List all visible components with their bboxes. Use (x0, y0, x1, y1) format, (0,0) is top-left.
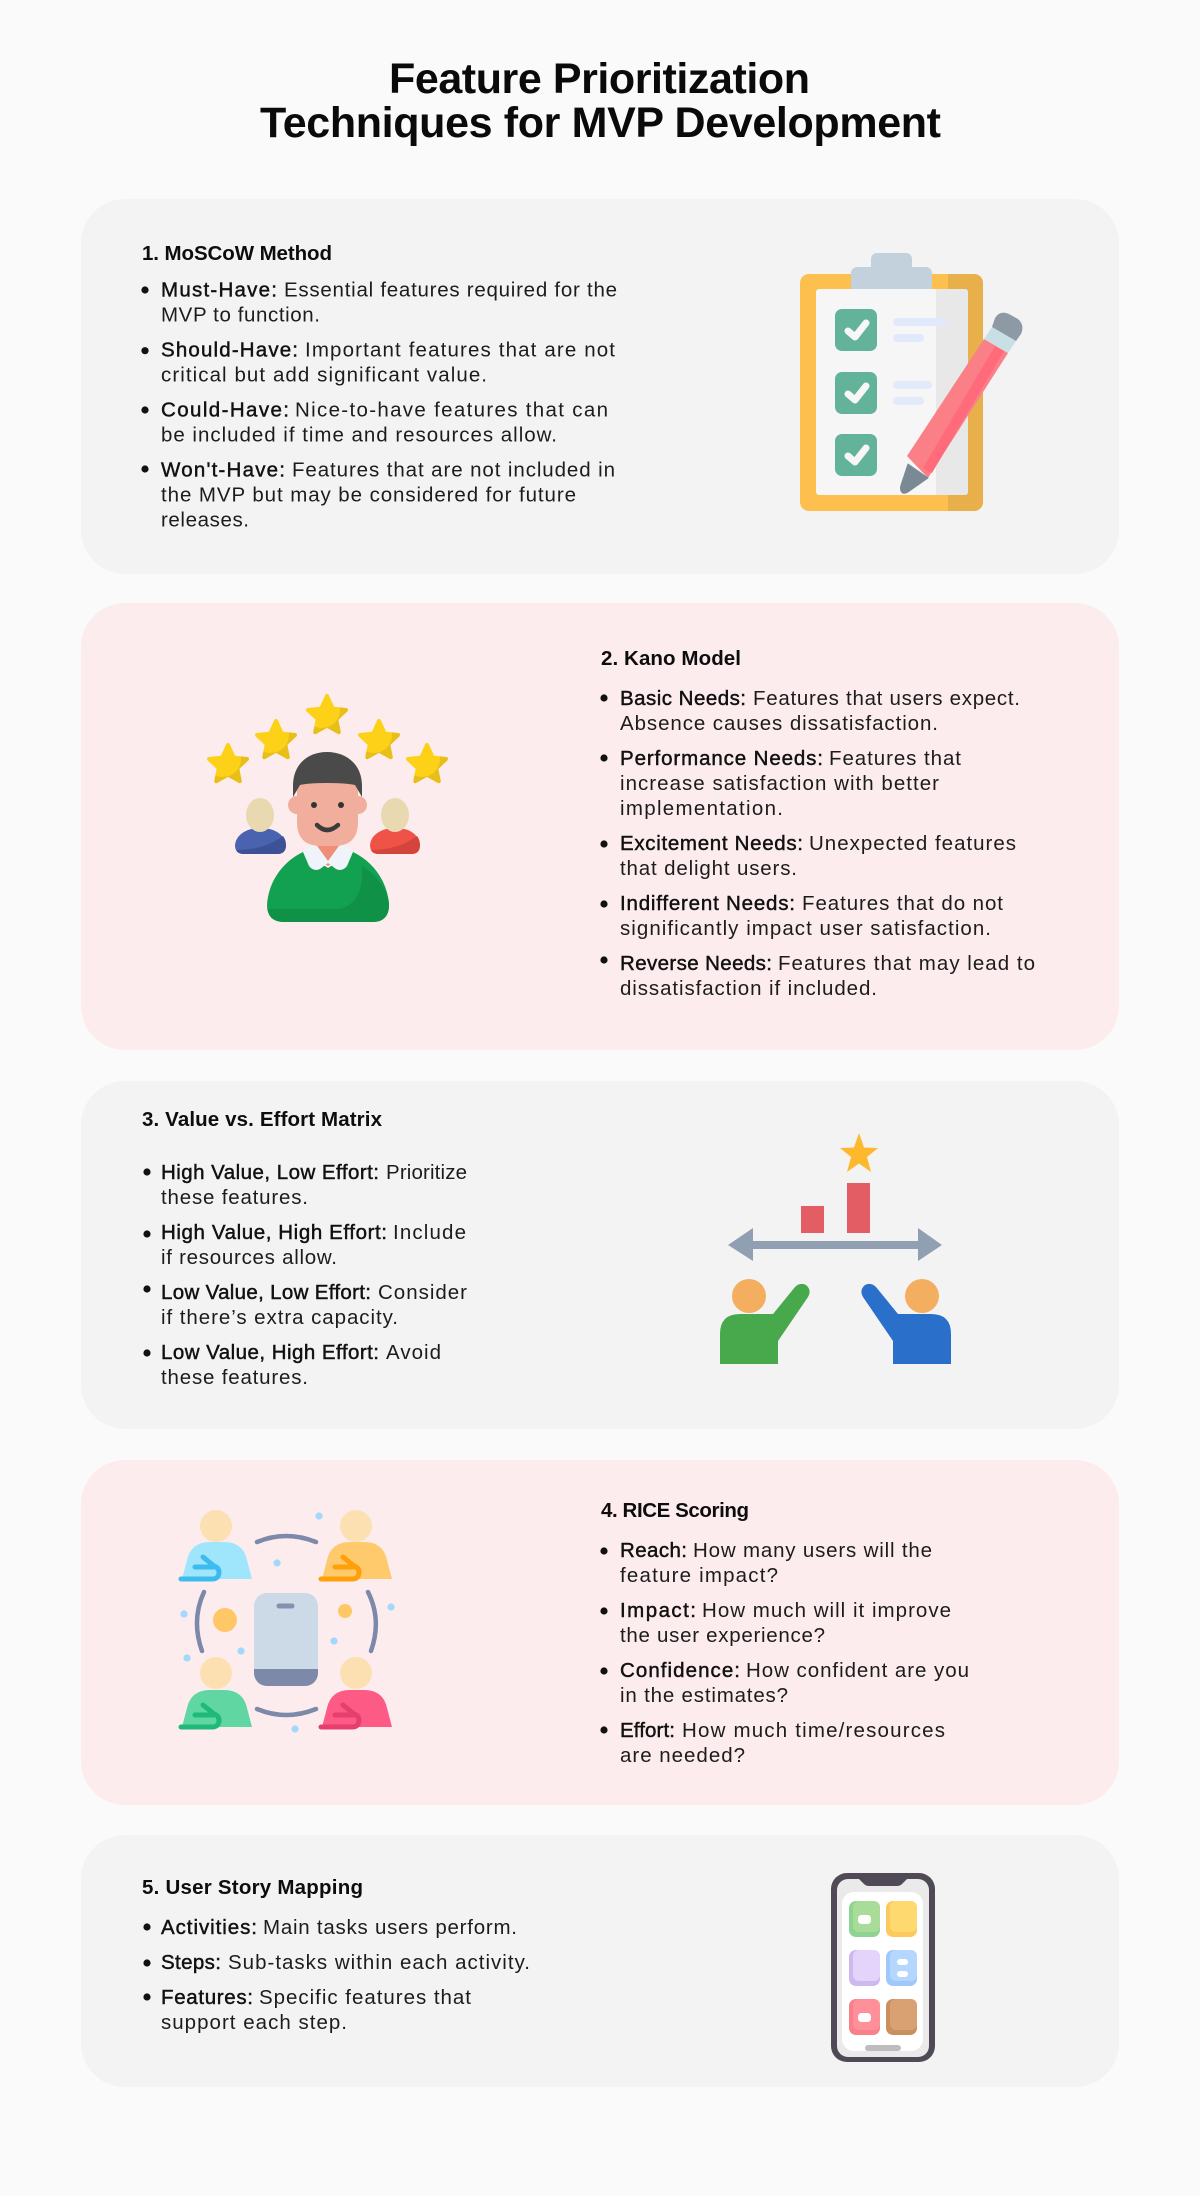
item: High Value, High Effort: Include (393, 1221, 466, 1244)
item: Basic Needs (600, 687, 1020, 735)
item: High Value, Low Effort: these features. (161, 1186, 308, 1209)
item: Reach: How many users will the (693, 1539, 932, 1562)
item: Low Value, Low Effort: Low Value, Low Effort: (161, 1281, 371, 1304)
heading: User Story Mapping: 5. User Story Mapping (142, 1876, 363, 1899)
item: High Value, High Effort: if resources allow. (161, 1246, 337, 1269)
item: Excitement Needs: that delight users. (620, 857, 797, 880)
heading: Value vs. Effort Matrix: 3. Value vs. Effort Matrix (142, 1108, 383, 1131)
item: Reverse Needs: Features that may lead to (778, 952, 1035, 975)
item: Indifferent Needs: Features that do not (802, 892, 1003, 915)
item: Features (143, 1986, 471, 2034)
item: Performance Needs (600, 747, 961, 820)
item: Confidence: in the estimates? (620, 1684, 788, 1707)
item: Low Value, High Effort: Avoid (386, 1341, 441, 1364)
item: Could-Have: Nice-to-have features that can (295, 399, 608, 422)
heading: Kano Model: 2. Kano Model (601, 647, 741, 670)
item: Performance Needs: Performance Needs: (620, 747, 823, 770)
item: Impact: the user experience? (620, 1624, 825, 1647)
heading: RICE Scoring: 4. RICE Scoring (601, 1499, 749, 1522)
item: Activities: Main tasks users perform. (263, 1916, 517, 1939)
item: Should-Have: Important features that are not (305, 339, 615, 362)
item: Reach: Reach: (620, 1539, 687, 1562)
item: Low Value, High Effort: Low Value, High Effort: (161, 1341, 379, 1364)
item: Reach: feature impact? (620, 1564, 778, 1587)
heading: MoSCoW Method: 1. MoSCoW Method (142, 242, 332, 265)
item: Reverse Needs: dissatisfaction if included. (620, 977, 877, 1000)
text block: Value vs. Effort list (143, 1161, 467, 1389)
item: Basic Needs: Basic Needs: (620, 687, 746, 710)
item: Must-Have: Essential features required for the (284, 279, 617, 302)
icon: clipboard with pencil (800, 253, 1022, 511)
item: Reverse Needs (600, 952, 1035, 1000)
item: High Value, Low Effort: Prioritize (386, 1161, 467, 1184)
item: Excitement Needs: Excitement Needs: (620, 832, 803, 855)
item: Confidence (600, 1659, 969, 1707)
item: Reach (600, 1539, 932, 1587)
text block: User Story Mapping list (143, 1916, 530, 2034)
item: Performance Needs: increase satisfaction with better (620, 772, 939, 795)
item: High Value, High Effort (143, 1221, 466, 1269)
item: Features: Specific features that (259, 1986, 471, 2009)
item: Excitement Needs (600, 832, 1016, 880)
panel: RICE Scoring (81, 1460, 1119, 1805)
panel: Kano Model (81, 603, 1119, 1050)
item: Low Value, Low Effort: if there’s extra capacity. (161, 1306, 398, 1329)
item: Confidence: How confident are you (746, 1659, 969, 1682)
item: Could-Have (141, 399, 608, 447)
title (260, 55, 941, 147)
item: Should-Have: Should-Have: (161, 339, 298, 362)
item: Low Value, Low Effort: Consider (378, 1281, 467, 1304)
panel: Value vs. Effort Matrix (81, 1081, 1119, 1429)
item: Basic Needs: Absence causes dissatisfaction. (620, 712, 938, 735)
panel: MoSCoW Method (81, 199, 1119, 574)
item: Should-Have (141, 339, 615, 387)
icon: users around a phone (180, 1510, 395, 1733)
text block: Kano list (600, 687, 1035, 1000)
item: Features: support each step. (161, 2011, 347, 2034)
item: High Value, Low Effort: High Value, Low Effort: (161, 1161, 379, 1184)
title: Techniques for MVP Development (260, 99, 941, 147)
item: Low Value, High Effort (143, 1341, 441, 1389)
item: Reverse Needs: Reverse Needs: (620, 952, 772, 975)
item: Won't-Have: Features that are not included in (292, 459, 615, 482)
item: Indifferent Needs: Indifferent Needs: (620, 892, 795, 915)
item: Won't-Have (141, 459, 615, 532)
item: Performance Needs: implementation. (620, 797, 783, 820)
item: Effort (600, 1719, 945, 1767)
item: Activities (143, 1916, 517, 1939)
item: Low Value, High Effort: these features. (161, 1366, 308, 1389)
text block: MoSCoW list (141, 279, 617, 532)
item: Impact (600, 1599, 951, 1647)
icon: value versus effort (720, 1133, 951, 1364)
item: Low Value, Low Effort (143, 1281, 467, 1329)
title: Feature Prioritization (389, 55, 810, 103)
item: Features: Features: (161, 1986, 253, 2009)
item: Impact: How much will it improve (702, 1599, 951, 1622)
item: Excitement Needs: Unexpected features (809, 832, 1016, 855)
item: Steps: Steps: (161, 1951, 221, 1974)
item: Impact: Impact: (620, 1599, 696, 1622)
text block: RICE list (600, 1539, 969, 1767)
item: Must-Have: Must-Have: (161, 279, 277, 302)
item: Should-Have: critical but add significant value. (161, 364, 487, 387)
item: Effort: are needed? (620, 1744, 745, 1767)
item: Confidence: Confidence: (620, 1659, 740, 1682)
item: Must-Have: MVP to function. (161, 304, 320, 327)
item: Could-Have: Could-Have: (161, 399, 289, 422)
item: Activities: Activities: (161, 1916, 257, 1939)
item: Effort: Effort: (620, 1719, 675, 1742)
item: Could-Have: be included if time and resources allow. (161, 424, 557, 447)
icon: phone with app tiles (831, 1873, 935, 2062)
icon: user with five stars (203, 691, 452, 922)
item: Indifferent Needs (600, 892, 1003, 940)
item: Basic Needs: Features that users expect. (753, 687, 1020, 710)
item: Won't-Have: the MVP but may be considered for future (161, 484, 576, 507)
panel: User Story Mapping (81, 1835, 1119, 2087)
item: Won't-Have: releases. (161, 509, 249, 532)
item: Must-Have (141, 279, 617, 327)
item: Performance Needs: Features that (829, 747, 961, 770)
item: Indifferent Needs: significantly impact user satisfaction. (620, 917, 991, 940)
item: High Value, High Effort: High Value, High Effort: (161, 1221, 387, 1244)
item: High Value, Low Effort (143, 1161, 467, 1209)
item: Effort: How much time/resources (682, 1719, 945, 1742)
item: Steps: Sub-tasks within each activity. (228, 1951, 530, 1974)
item: Won't-Have: Won't-Have: (161, 459, 285, 482)
